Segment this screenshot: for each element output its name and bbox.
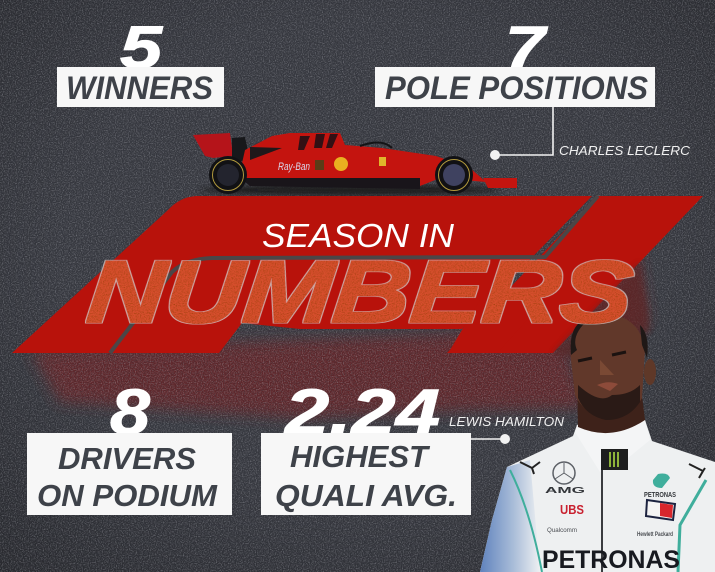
portrait: lewis hamilton: Hewlett Packard [637, 531, 673, 538]
callout: charles leclerc [490, 107, 691, 160]
track line across stripes [110, 196, 598, 353]
stat box: highest quali average [261, 433, 471, 515]
stat number: pole positions: 7 [505, 14, 548, 81]
callout: lewis hamilton: LEWIS HAMILTON [449, 415, 565, 429]
maroon overlay on right stripe [553, 262, 650, 365]
portrait: lewis hamilton: UBS [560, 502, 584, 517]
red racing stripes [12, 196, 703, 353]
heading: season in: SEASON IN [262, 217, 454, 254]
ferrari car [193, 133, 517, 195]
stat box: highest quali average: QUALI AVG. [275, 478, 457, 513]
portrait: lewis hamilton: AMG [545, 486, 585, 495]
portrait: lewis hamilton: Qualcomm [547, 527, 577, 534]
stat number: highest quali average: 2,24 [284, 376, 440, 448]
maroon haze [30, 238, 648, 418]
stat number: drivers on podium: 8 [110, 376, 150, 448]
portrait: lewis hamilton: PETRONAS [644, 492, 676, 499]
callout: charles leclerc: CHARLES LECLERC [559, 144, 691, 158]
heading: numbers: NUMBERS [83, 243, 637, 341]
stat box: drivers on podium: ON PODIUM [37, 478, 218, 513]
stat box: drivers on podium [27, 433, 232, 515]
stat box: highest quali average: HIGHEST [290, 439, 431, 474]
stat box: pole positions: POLE POSITIONS [385, 70, 649, 106]
stat box: winners: WINNERS [66, 70, 214, 106]
callout: lewis hamilton [449, 415, 565, 444]
stat number: winners: 5 [120, 14, 164, 81]
ferrari car: Ray-Ban [278, 161, 310, 173]
portrait: lewis hamilton [480, 314, 715, 572]
stat box: drivers on podium: DRIVERS [58, 441, 196, 476]
